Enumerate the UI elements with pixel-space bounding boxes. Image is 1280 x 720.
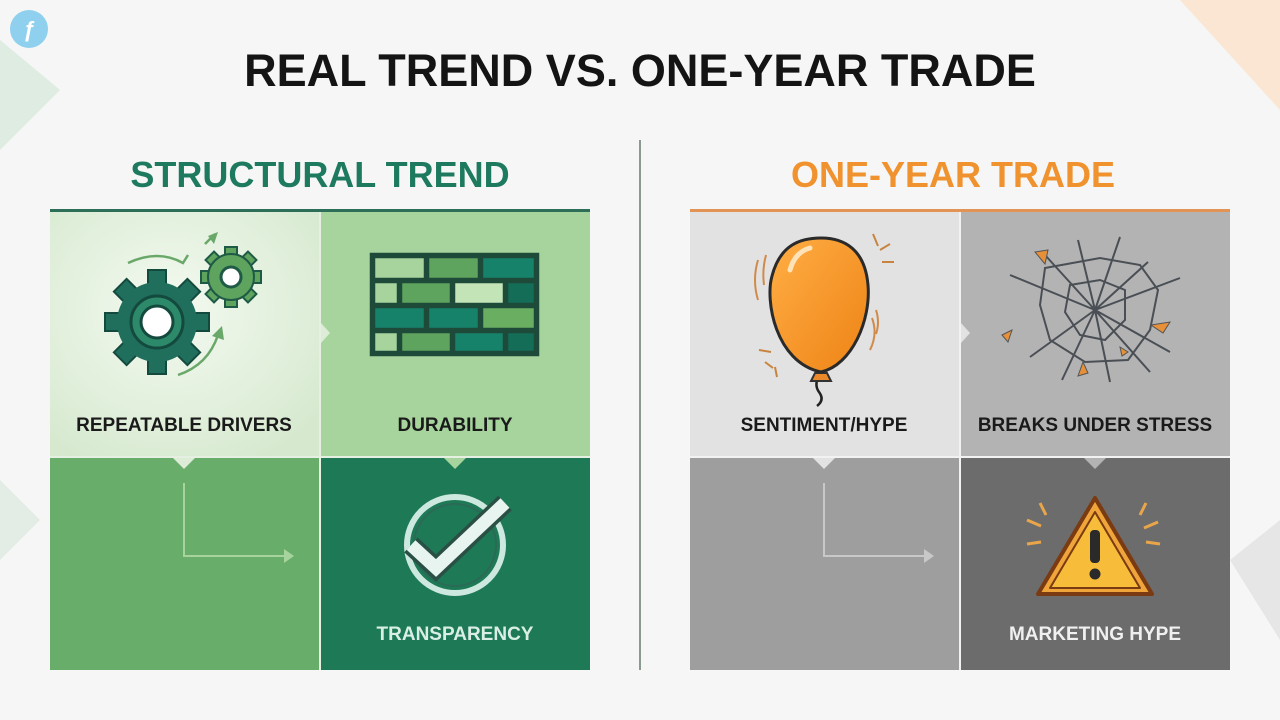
- heading: one-year trade: ONE-YEAR TRADE: [791, 154, 1115, 195]
- divider: [639, 140, 641, 670]
- label: marketing hype: MARKETING HYPE: [1009, 624, 1181, 645]
- arrow: connector: [184, 483, 294, 563]
- cell: repeatable drivers: [50, 212, 319, 456]
- icon: balloon: [755, 234, 894, 406]
- label: sentiment/hype: SENTIMENT/HYPE: [741, 415, 907, 436]
- panel: structural trend grid: [50, 209, 590, 670]
- cell: bottom-left grey: [690, 458, 959, 670]
- panel: one-year trade grid: [690, 209, 1230, 670]
- cell: durability: [321, 212, 590, 456]
- cell: breaks under stress: [961, 212, 1230, 456]
- icon: warning triangle: [1027, 498, 1160, 594]
- label: transparency: TRANSPARENCY: [377, 624, 534, 645]
- icon: logo: [10, 10, 48, 48]
- icon: check circle: [407, 497, 505, 593]
- cell: transparency: [309, 458, 590, 670]
- label: breaks under stress: BREAKS UNDER STRESS: [978, 415, 1212, 436]
- cell: marketing hype: [949, 458, 1230, 670]
- cell: sentiment/hype: [690, 212, 959, 456]
- icon: gears: [105, 232, 261, 375]
- icon: shattered glass: [1002, 237, 1180, 382]
- icon: brick wall: [371, 254, 538, 355]
- label: repeatable drivers: REPEATABLE DRIVERS: [76, 415, 292, 436]
- icon: logo: ƒ: [23, 17, 35, 42]
- label: durability: DURABILITY: [397, 415, 513, 436]
- heading: structural trend: STRUCTURAL TREND: [130, 154, 510, 195]
- arrow: connector: [824, 483, 934, 563]
- title: REAL TREND VS. ONE-YEAR TRADE: [244, 45, 1036, 96]
- cell: bottom-left: [50, 458, 319, 670]
